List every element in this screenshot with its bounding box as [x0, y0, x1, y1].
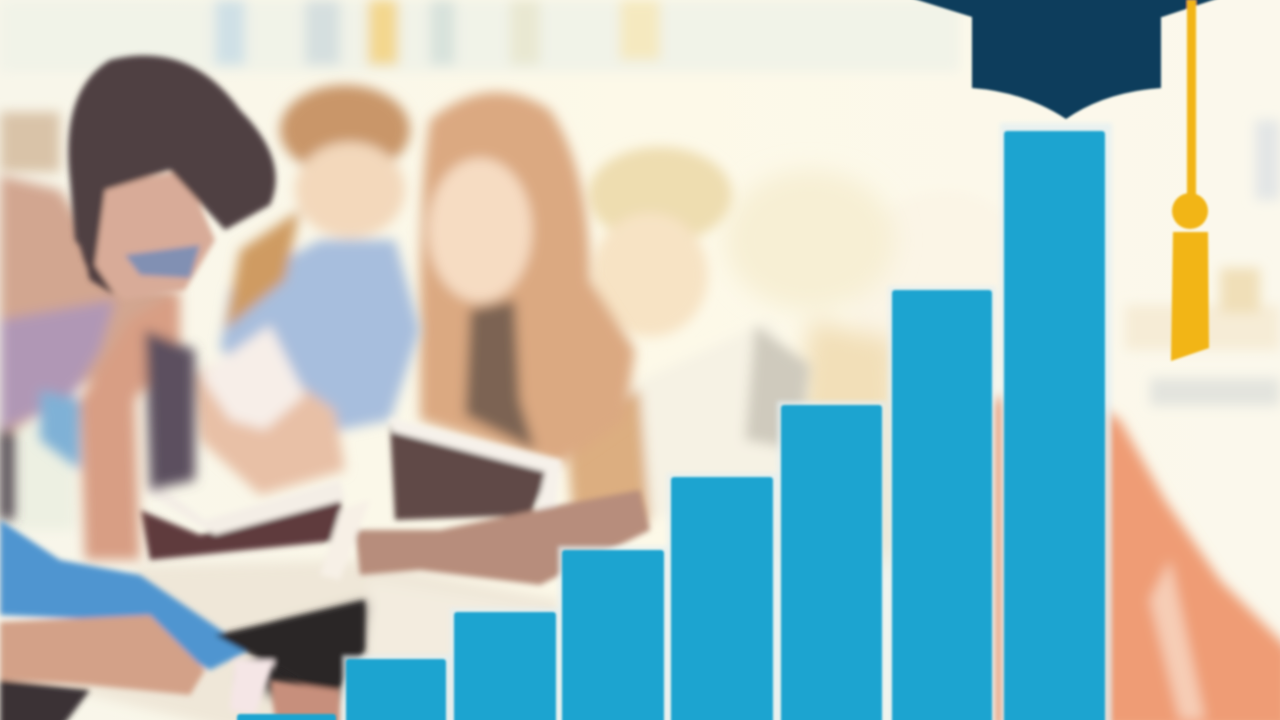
photo: student in orange, right: [850, 190, 1280, 720]
tassel: [1171, 232, 1209, 361]
bar 6: [781, 405, 882, 720]
cap base: [972, 0, 1161, 119]
photo: table and books: [70, 418, 650, 720]
photo: male student with glasses, left: [0, 56, 276, 560]
bar 1: [237, 714, 336, 720]
photo: student in blue sleeve, bottom left: [0, 520, 365, 720]
bar 2: [346, 659, 446, 720]
photo: student with blue sweater, second: [190, 85, 420, 495]
bar 5: [671, 477, 773, 720]
bar 4: [562, 550, 664, 720]
bar chart: [237, 131, 1105, 720]
bar halo: [342, 123, 1112, 720]
tassel knot: [1172, 193, 1208, 229]
photo: student with long red hair, third: [420, 92, 635, 465]
bar 8: [1004, 131, 1105, 720]
photo: student, blonde with white top, fourth: [565, 147, 810, 545]
cap board: [905, 0, 1225, 17]
icon: graduation cap: [905, 0, 1225, 361]
tassel cord: [1187, 0, 1196, 200]
bar 7: [892, 290, 992, 720]
photo: student, pale blonde, fifth: [725, 170, 900, 560]
bar 3: [454, 612, 556, 720]
